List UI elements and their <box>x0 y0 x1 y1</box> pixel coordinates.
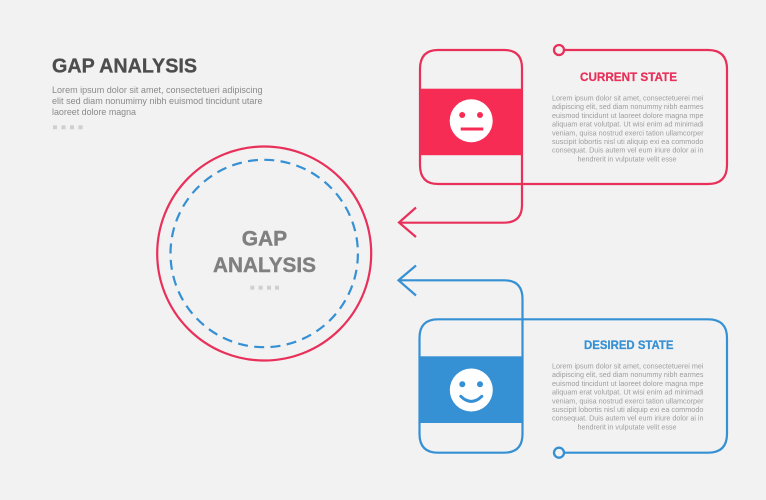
circle dots <box>250 286 279 290</box>
circle label: GAP <box>242 228 287 250</box>
current state text: adipiscing elit, sed diam nonummy nibh earmes <box>552 102 704 111</box>
current state text: suscipit lobortis nisl uti aliquip exi ea commodo <box>552 137 704 146</box>
central circle <box>157 146 371 360</box>
desired state text <box>552 362 704 431</box>
intro text: Lorem ipsum dolor sit amet, consectetueri adipiscing <box>52 85 262 95</box>
blue band <box>420 356 522 423</box>
icon: neutral face <box>450 99 493 142</box>
circle label: ANALYSIS <box>213 254 316 277</box>
blue arrow head <box>398 266 416 296</box>
current state text: veniam, quisa nostrud exerci tation ullamcorper <box>552 128 704 137</box>
desired state text: suscipit lobortis nisl uti aliquip exi ea commodo <box>552 405 704 414</box>
red start node <box>554 45 564 55</box>
intro text: laoreet dolore magna <box>52 107 137 117</box>
desired state heading: DESIRED STATE <box>584 338 674 352</box>
blue outline and arrow connector <box>398 280 727 453</box>
current state text: Lorem ipsum dolor sit amet, consectetuerei mei <box>552 94 704 102</box>
current state text: euismod tincidunt ut laoreet dolore magna mpe <box>552 111 704 120</box>
intro text <box>52 85 262 117</box>
current state text: aliquam erat volutpat. Ut wisi enim ad minimadi <box>552 120 704 129</box>
desired state text: hendrerit in vulputate velit esse <box>578 422 676 431</box>
desired state text: aliquam erat volutpat. Ut wisi enim ad minimadi <box>552 388 704 397</box>
red outline and arrow connector <box>399 50 727 223</box>
current state heading: CURRENT STATE <box>580 70 677 84</box>
current state text <box>552 94 704 163</box>
header dots <box>53 125 82 129</box>
intro text: elit sed diam nonumimy nibh euismod tincidunt utare <box>52 96 262 106</box>
desired state text: veniam, quisa nostrud exerci tation ullamcorper <box>552 396 704 405</box>
blue start node <box>554 448 564 458</box>
desired state text: adipiscing elit, sed diam nonummy nibh earmes <box>552 370 704 379</box>
title: GAP ANALYSIS <box>52 56 197 78</box>
icon: smiling face <box>450 368 493 412</box>
current state text: consequat. Duis autem vel eum iriure dolor ai in <box>552 146 704 155</box>
panel: desired state <box>398 266 727 458</box>
desired state text: euismod tincidunt ut laoreet dolore magna mpe <box>552 379 704 388</box>
header block <box>52 56 262 129</box>
red band <box>420 89 522 155</box>
desired state text: Lorem ipsum dolor sit amet, consectetuerei mei <box>552 362 704 370</box>
red arrow head <box>399 208 416 237</box>
current state text: hendrerit in vulputate velit esse <box>578 154 676 163</box>
circle label <box>213 228 316 277</box>
desired state text: consequat. Duis autem vel eum iriure dolor ai in <box>552 414 704 423</box>
outer red ring <box>157 146 371 360</box>
panel: current state <box>399 45 727 237</box>
inner dashed blue ring <box>171 160 358 347</box>
